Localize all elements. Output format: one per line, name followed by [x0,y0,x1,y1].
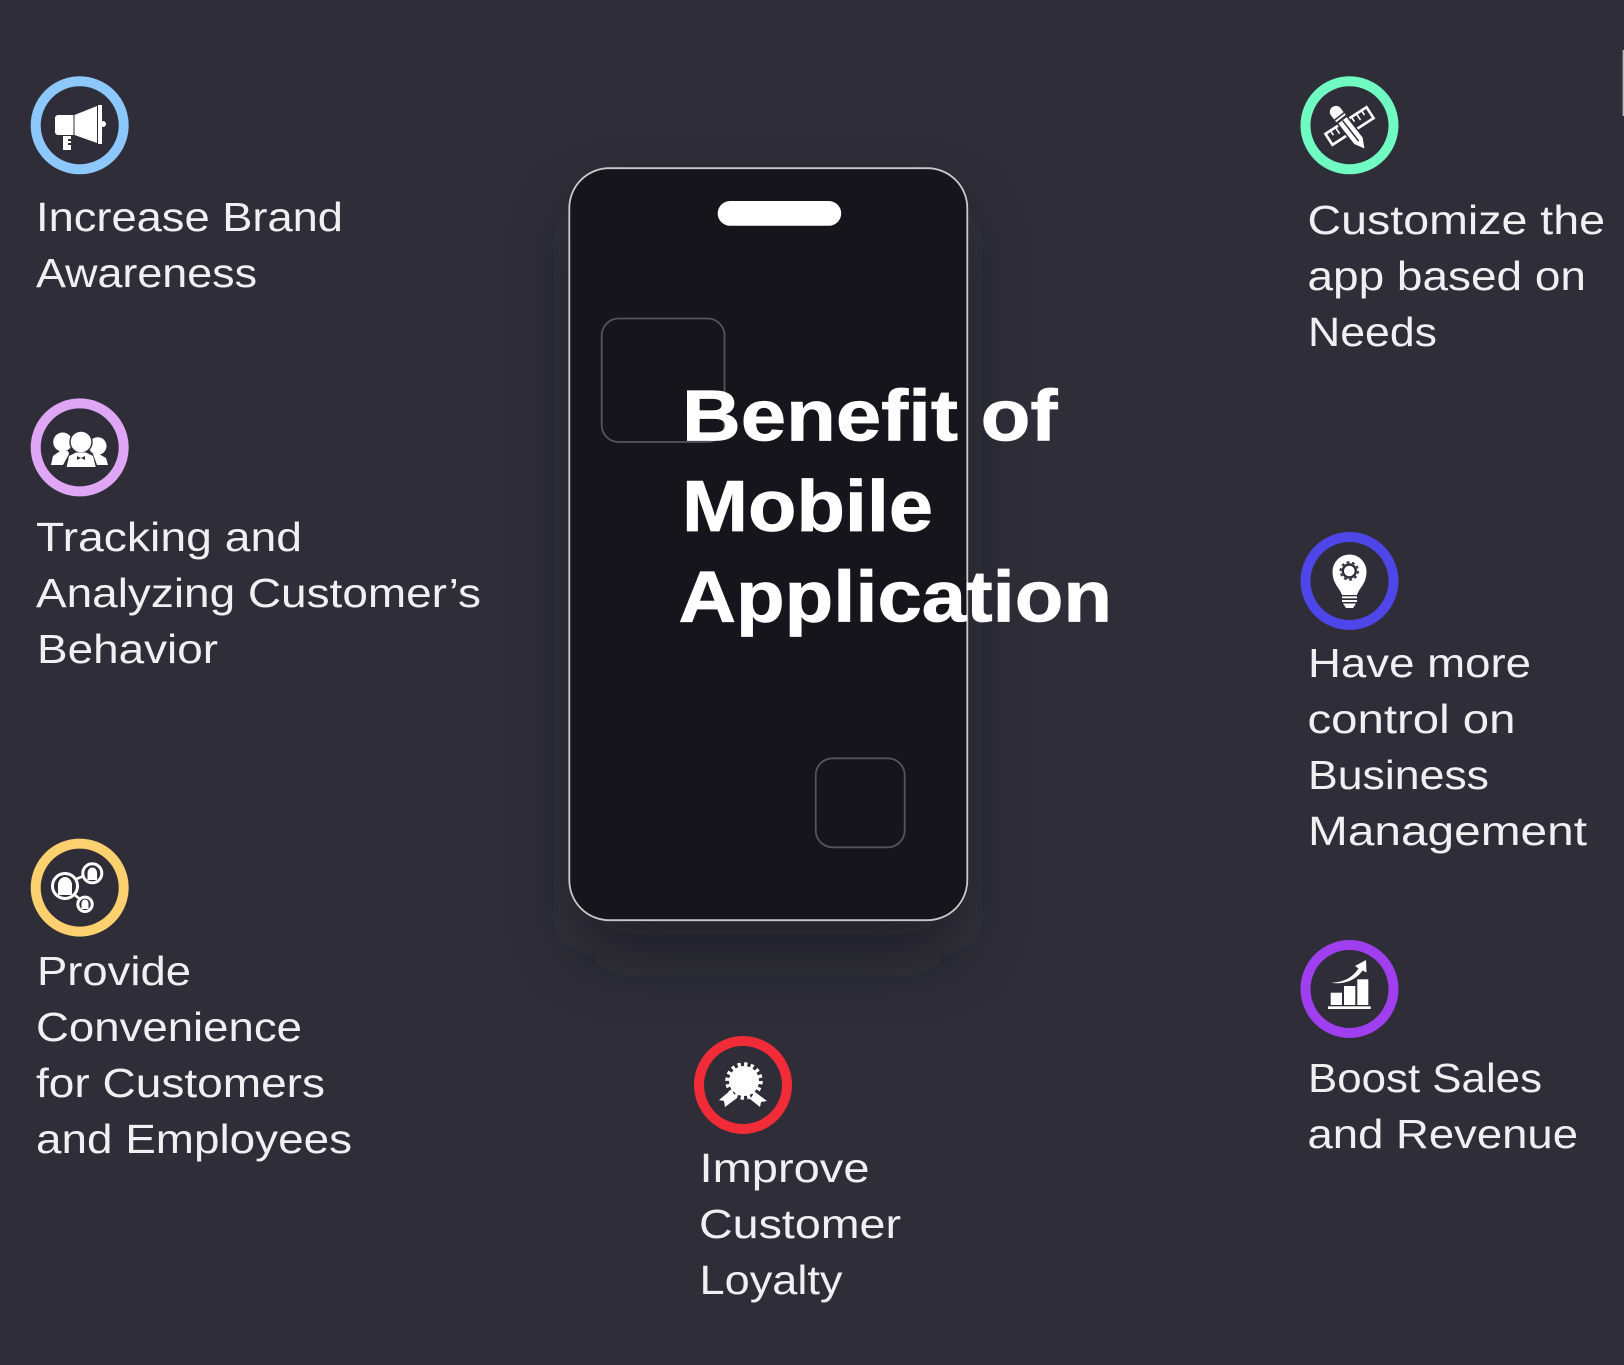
label: and Employees [36,1116,352,1162]
icon: connected people [36,844,124,932]
label [36,514,481,672]
title [678,376,1112,638]
icon: light bulb with gear [1306,537,1394,625]
label [36,948,352,1162]
icon: megaphone [36,81,124,169]
label: and Revenue [1308,1111,1578,1157]
label: Behavior [37,626,218,672]
label: for Customers [36,1060,325,1106]
label: app based on [1308,253,1586,299]
screen square bottom [816,758,905,847]
label: Provide [37,948,191,994]
label: Tracking and [36,514,302,560]
panel: improve customer loyalty [699,1041,901,1303]
label: Customize the [1308,197,1605,243]
label [1308,640,1588,854]
panel: provide convenience [36,844,352,1162]
phone body [569,168,967,920]
label [699,1145,901,1303]
panel: tracking customer behavior [36,403,481,672]
panel: customize the app [1306,81,1605,355]
label: Business [1308,752,1489,798]
label [36,194,343,296]
label: Boost Sales [1308,1055,1542,1101]
label: control on [1308,696,1516,742]
label: Customer [699,1201,901,1247]
label: Awareness [36,250,257,296]
label: Improve [700,1145,870,1191]
icon: award rosette [699,1041,787,1129]
label [1308,1055,1578,1157]
icon: people group [36,403,124,491]
label: Loyalty [700,1257,843,1303]
icon: pencil and ruler [1306,81,1394,169]
title: Mobile [682,466,933,547]
label [1308,197,1605,355]
phone speaker pill [718,201,841,226]
phone illustration [569,168,967,955]
title: Application [678,556,1112,638]
panel: increase brand awareness [36,81,343,296]
label: Management [1308,808,1588,854]
label: Have more [1308,640,1531,686]
panel: more control [1306,537,1588,854]
icon: growth chart [1306,945,1394,1033]
label: Increase Brand [36,194,343,240]
screen square top [602,318,724,442]
panel: boost sales [1306,945,1578,1157]
title: Benefit of [682,376,1058,456]
label: Needs [1308,309,1437,355]
label: Convenience [36,1004,302,1050]
label: Analyzing Customer’s [36,570,481,616]
